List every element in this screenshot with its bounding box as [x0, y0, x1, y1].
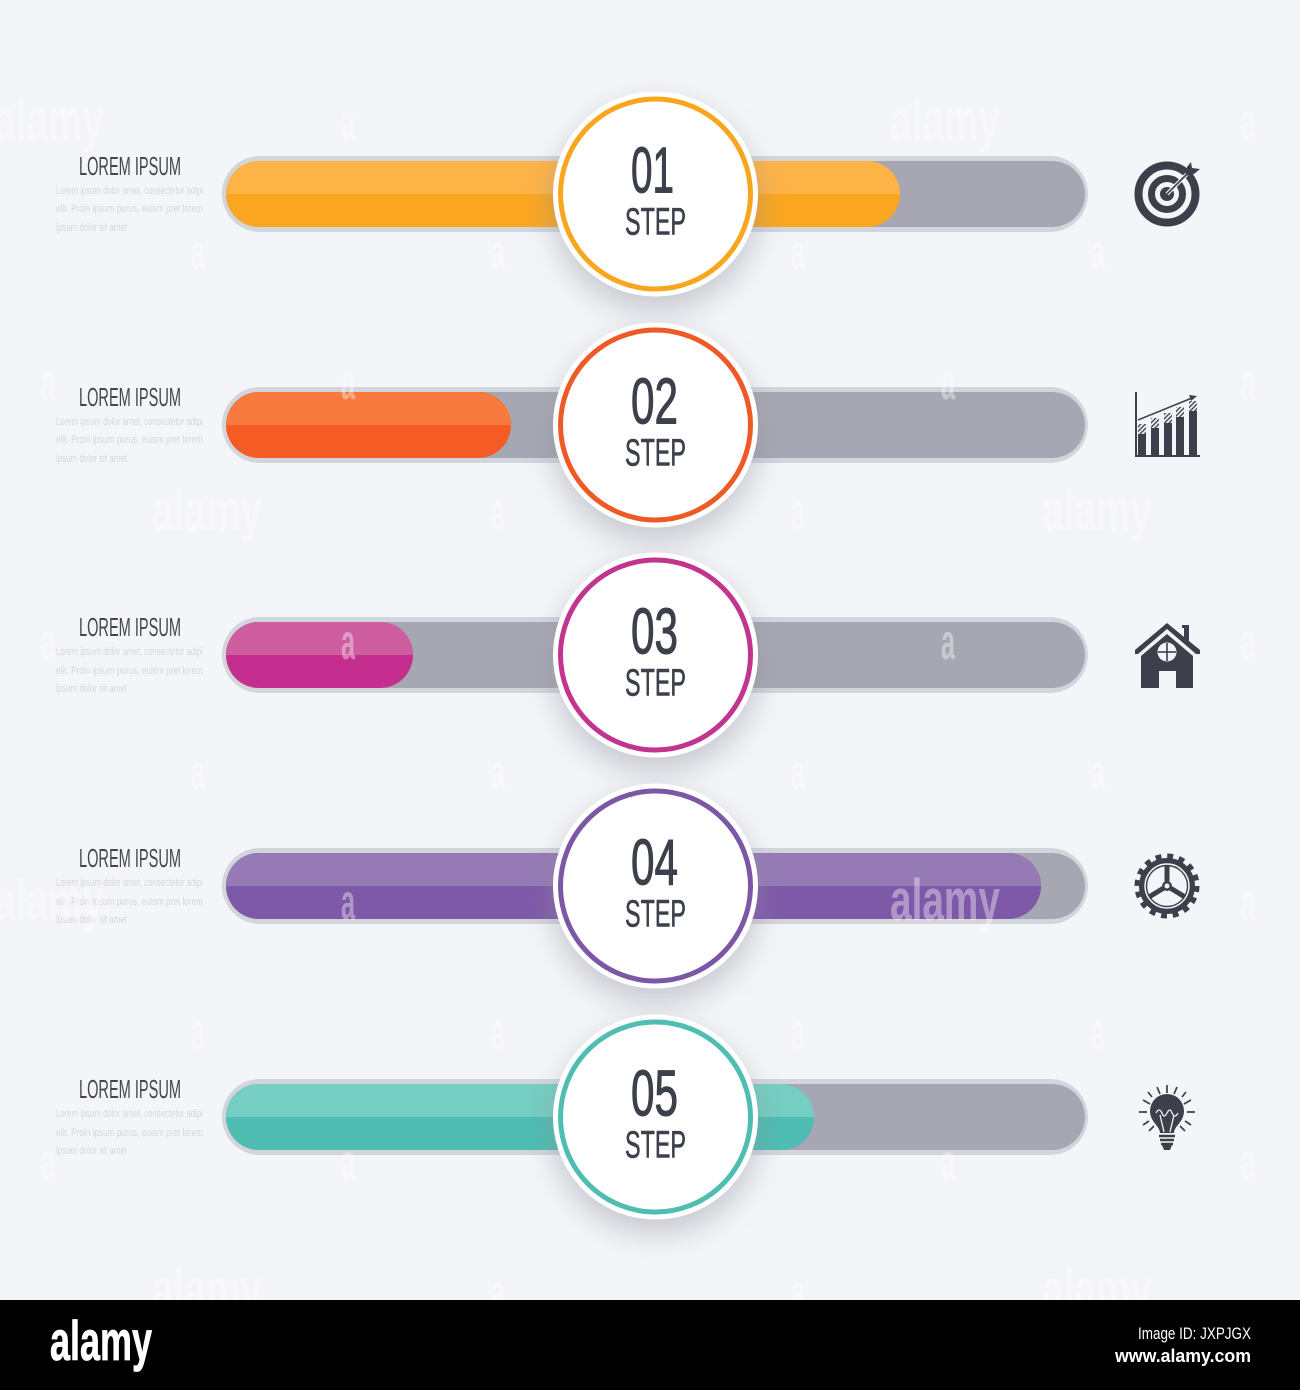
- watermarks: a: [491, 224, 506, 280]
- text block: lorem ipsum 1: elit. Proin ipsum purus, euism pret lorem: [56, 203, 203, 215]
- watermarks: a: [941, 614, 956, 670]
- text block: lorem ipsum 4: LOREM IPSUM: [79, 843, 181, 873]
- step circle 5: 05: [631, 1056, 678, 1130]
- footer logo: alamy: [50, 1309, 152, 1372]
- watermarks: a: [1091, 1004, 1106, 1060]
- footer url: www.alamy.com: [1114, 1346, 1251, 1366]
- progress bar 1: [222, 156, 1088, 232]
- text block: lorem ipsum 1: ipsum dolor sit amet: [56, 222, 127, 234]
- text block: lorem ipsum 2: [56, 382, 203, 465]
- text block: lorem ipsum 3: LOREM IPSUM: [79, 612, 181, 642]
- watermarks: a: [1241, 614, 1256, 670]
- row 1: step 01: [56, 92, 1200, 311]
- watermarks: a: [791, 224, 806, 280]
- text block: lorem ipsum 4: [56, 843, 203, 926]
- step circle 4: STEP: [625, 894, 686, 936]
- text block: lorem ipsum 4: Lorem ipsum dolor amet, consectetur adipi: [56, 877, 203, 889]
- row 5: step 05: [56, 1014, 1195, 1234]
- text block: lorem ipsum 2: elit. Proin ipsum purus, euism pret lorem: [56, 434, 203, 446]
- footer image id: Image ID: JXPJGX: [1138, 1324, 1251, 1343]
- text block: lorem ipsum 5: ipsum dolor sit amet: [56, 1145, 127, 1157]
- step circle 3: 03: [631, 594, 678, 668]
- watermarks: a: [341, 354, 356, 410]
- watermarks: a: [491, 744, 506, 800]
- watermarks: alamy: [152, 1258, 262, 1323]
- watermarks: alamy: [890, 88, 1000, 153]
- progress bar 2: [222, 387, 1088, 463]
- step circle 1: [552, 92, 760, 311]
- text block: lorem ipsum 1: Lorem ipsum dolor amet, consectetur adipi: [56, 185, 203, 197]
- watermarks: a: [491, 484, 506, 540]
- watermarks: a: [41, 1134, 56, 1190]
- step circle 5: [552, 1014, 760, 1234]
- text block: lorem ipsum 5: Lorem ipsum dolor amet, consectetur adipi: [56, 1108, 203, 1120]
- text block: lorem ipsum 3: ipsum dolor sit amet: [56, 683, 127, 695]
- watermarks: a: [1241, 94, 1256, 150]
- text block: lorem ipsum 4: ipsum dolor sit amet: [56, 914, 127, 926]
- watermarks: a: [341, 874, 356, 930]
- watermarks: a: [941, 354, 956, 410]
- progress bar 3: [222, 617, 1088, 693]
- watermarks: a: [41, 354, 56, 410]
- icon: light bulb: [1139, 1085, 1195, 1150]
- watermarks: a: [191, 224, 206, 280]
- text block: lorem ipsum 5: elit. Proin ipsum purus, euism pret lorem: [56, 1127, 203, 1139]
- watermarks: a: [791, 484, 806, 540]
- text block: lorem ipsum 4: elit. Proin ipsum purus, euism pret lorem: [56, 896, 203, 908]
- text block: lorem ipsum 2: LOREM IPSUM: [79, 382, 181, 412]
- footer bar: [0, 1300, 1300, 1390]
- watermarks: a: [191, 744, 206, 800]
- icon: house: [1135, 623, 1200, 688]
- watermarks: a: [1241, 874, 1256, 930]
- step circle 2: [552, 322, 760, 542]
- watermarks: a: [1091, 224, 1106, 280]
- watermarks: a: [341, 614, 356, 670]
- progress bar 4: [222, 848, 1088, 924]
- step circle 3: [552, 552, 760, 772]
- watermarks: a: [341, 1134, 356, 1190]
- watermarks: a: [791, 1004, 806, 1060]
- text block: lorem ipsum 5: LOREM IPSUM: [79, 1074, 181, 1104]
- step circle 4: 04: [631, 826, 678, 898]
- icon: target: [1138, 162, 1200, 222]
- text block: lorem ipsum 5: [56, 1074, 203, 1157]
- watermarks: a: [41, 614, 56, 670]
- watermarks: a: [491, 1004, 506, 1060]
- step circle 1: STEP: [625, 202, 686, 244]
- step circle 5: STEP: [625, 1124, 686, 1166]
- icon: growth chart: [1135, 392, 1200, 457]
- step circle 2: 02: [631, 364, 678, 438]
- text block: lorem ipsum 1: [56, 151, 203, 234]
- watermarks: alamy: [890, 868, 1000, 933]
- watermarks: a: [791, 1264, 806, 1320]
- row 4: step 04: [56, 784, 1196, 1003]
- watermarks: a: [791, 744, 806, 800]
- watermarks: a: [941, 1134, 956, 1190]
- step circle 1: 01: [631, 134, 674, 206]
- watermarks: a: [491, 1264, 506, 1320]
- row 3: step 03: [56, 552, 1200, 772]
- text block: lorem ipsum 3: elit. Proin ipsum purus, euism pret lorem: [56, 665, 203, 677]
- text block: lorem ipsum 3: Lorem ipsum dolor amet, consectetur adipi: [56, 646, 203, 658]
- progress bar 5: [222, 1079, 1088, 1155]
- text block: lorem ipsum 1: LOREM IPSUM: [79, 151, 181, 181]
- step circle 2: STEP: [625, 432, 686, 474]
- step circle 4: [552, 784, 760, 1003]
- text block: lorem ipsum 2: ipsum dolor sit amet: [56, 453, 127, 465]
- watermarks: alamy: [152, 478, 262, 543]
- watermarks: alamy: [1042, 1258, 1152, 1323]
- icon: gear: [1138, 857, 1196, 915]
- step circle 3: STEP: [625, 662, 686, 704]
- watermarks: a: [341, 94, 356, 150]
- watermarks: a: [1241, 1134, 1256, 1190]
- row 2: step 02: [56, 322, 1200, 542]
- text block: lorem ipsum 3: [56, 612, 203, 695]
- watermarks: a: [191, 1004, 206, 1060]
- text block: lorem ipsum 2: Lorem ipsum dolor amet, consectetur adipi: [56, 416, 203, 428]
- watermarks: alamy: [1042, 478, 1152, 543]
- watermarks: a: [1241, 354, 1256, 410]
- watermarks: a: [1091, 744, 1106, 800]
